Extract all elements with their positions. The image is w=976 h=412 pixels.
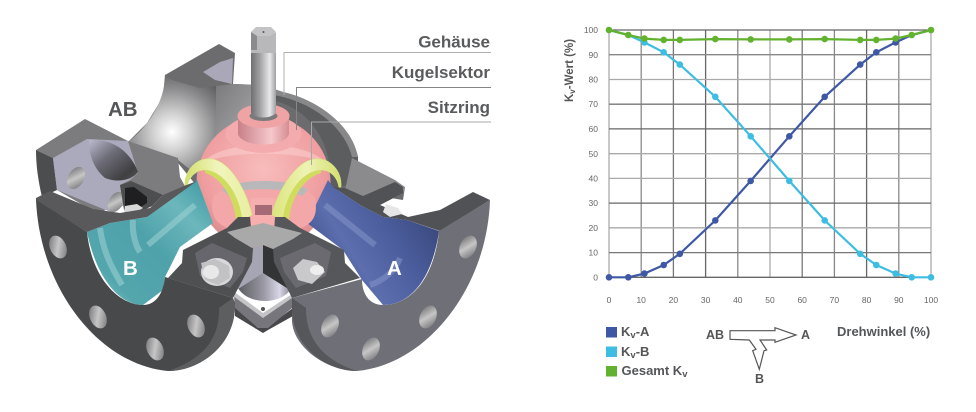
housing inner shell (270, 92, 358, 190)
Kugelsektor ball (196, 104, 330, 250)
callout: Kugelsektor: Kugelsektor (392, 63, 490, 82)
valve cutaway illustration (36, 27, 490, 371)
front left flange top surface (36, 181, 197, 232)
y axis labels: 70 (589, 99, 598, 109)
bottom cover (233, 245, 293, 333)
y axis labels: 40 (589, 174, 598, 184)
legend item Gesamt Kv (606, 363, 688, 380)
x axis labels: 0 (607, 295, 612, 305)
front left flange band (168, 298, 235, 371)
center block top (227, 223, 302, 249)
series Kv-B (609, 30, 934, 281)
y axis labels: 30 (589, 198, 598, 208)
right back lobe (345, 158, 405, 205)
legend (606, 324, 688, 380)
legend item Kv-A: K (621, 324, 630, 339)
flow direction arrow: AB (706, 328, 724, 342)
back housing inner wall (216, 84, 262, 150)
x axis labels: 90 (894, 295, 904, 305)
housing top rim (262, 85, 358, 157)
x axis labels: 70 (830, 295, 839, 305)
y axis labels: 10 (589, 248, 598, 258)
legend item Kv-B (606, 344, 649, 361)
x axis labels (607, 295, 938, 305)
flange cavity (89, 140, 138, 180)
x axis labels: 100 (924, 295, 938, 305)
legend item Kv-B: -B (636, 344, 649, 359)
legend item Gesamt Kv: Gesamt K (622, 363, 682, 378)
back flange lavender patch (203, 58, 233, 84)
Sitzring left (185, 159, 252, 222)
y axis title: -Wert (%) (564, 39, 576, 89)
series Kv-A (606, 30, 931, 281)
left back flange top surface (36, 119, 186, 215)
Blue bore A (307, 180, 439, 305)
front left bolt holes (46, 233, 208, 363)
y axis labels: 90 (589, 50, 598, 60)
y axis labels: 100 (584, 25, 598, 35)
grid (609, 30, 931, 277)
y axis labels: 0 (593, 272, 598, 282)
port label A: A (387, 257, 402, 280)
lug left (168, 217, 253, 298)
y axis labels: 60 (589, 124, 598, 134)
nut left (201, 258, 233, 286)
front right flange band (292, 298, 357, 371)
flow direction arrow: A (801, 328, 810, 342)
back flange bolt holes (63, 164, 128, 215)
front right bolt holes (318, 233, 480, 363)
left back flange face (53, 139, 138, 213)
ball opening (212, 181, 316, 232)
callout: Sitzring (312, 98, 491, 165)
x axis labels: 60 (797, 295, 807, 305)
x axis labels: 50 (765, 295, 775, 305)
legend item Kv-A (606, 324, 650, 341)
callout: Sitzring: Sitzring (428, 98, 490, 117)
legend item Gesamt Kv: v (682, 369, 688, 380)
front right flange (292, 200, 490, 371)
back housing bore (128, 75, 216, 175)
flow direction arrow (706, 328, 810, 386)
bolt stub right (383, 204, 402, 217)
legend item Kv-A: -A (636, 324, 650, 339)
bolt behind flange (124, 204, 143, 213)
line chart (564, 25, 938, 305)
callout: Gehäuse: Gehäuse (418, 32, 490, 52)
dark bolt pocket (120, 181, 163, 214)
x axis labels: 20 (669, 295, 678, 305)
stem (251, 27, 276, 118)
legend item Kv-B: v (630, 350, 636, 361)
x axis title: Drehwinkel (%) (837, 324, 930, 339)
nut right (293, 259, 325, 284)
y axis labels: 20 (589, 223, 598, 233)
port label B: B (123, 257, 138, 280)
left back flange side (36, 150, 57, 197)
x axis labels: 10 (636, 295, 646, 305)
Sitzring right (272, 159, 341, 222)
front left flange (36, 200, 235, 371)
Teal bore B (87, 180, 213, 305)
series Gesamt Kv (606, 27, 934, 43)
x axis labels: 80 (862, 295, 872, 305)
callout: Gehäuse (284, 32, 491, 95)
y axis title: K (564, 94, 576, 102)
x axis labels: 40 (733, 295, 743, 305)
front right flange top surface (333, 182, 490, 231)
teal bore highlights (100, 205, 195, 285)
y axis labels (584, 25, 598, 282)
blue bore highlights (325, 205, 400, 285)
flow direction arrow: B (755, 372, 764, 386)
lug right (273, 217, 360, 298)
port label AB: AB (108, 98, 138, 121)
y axis title: v (568, 89, 577, 94)
legend item Kv-A: v (630, 330, 636, 341)
back housing wall (128, 44, 405, 200)
callout: Kugelsektor (296, 63, 491, 130)
legend item Kv-B: K (621, 344, 630, 359)
y axis labels: 80 (589, 74, 598, 84)
x axis labels: 30 (701, 295, 711, 305)
y axis labels: 50 (589, 149, 598, 159)
